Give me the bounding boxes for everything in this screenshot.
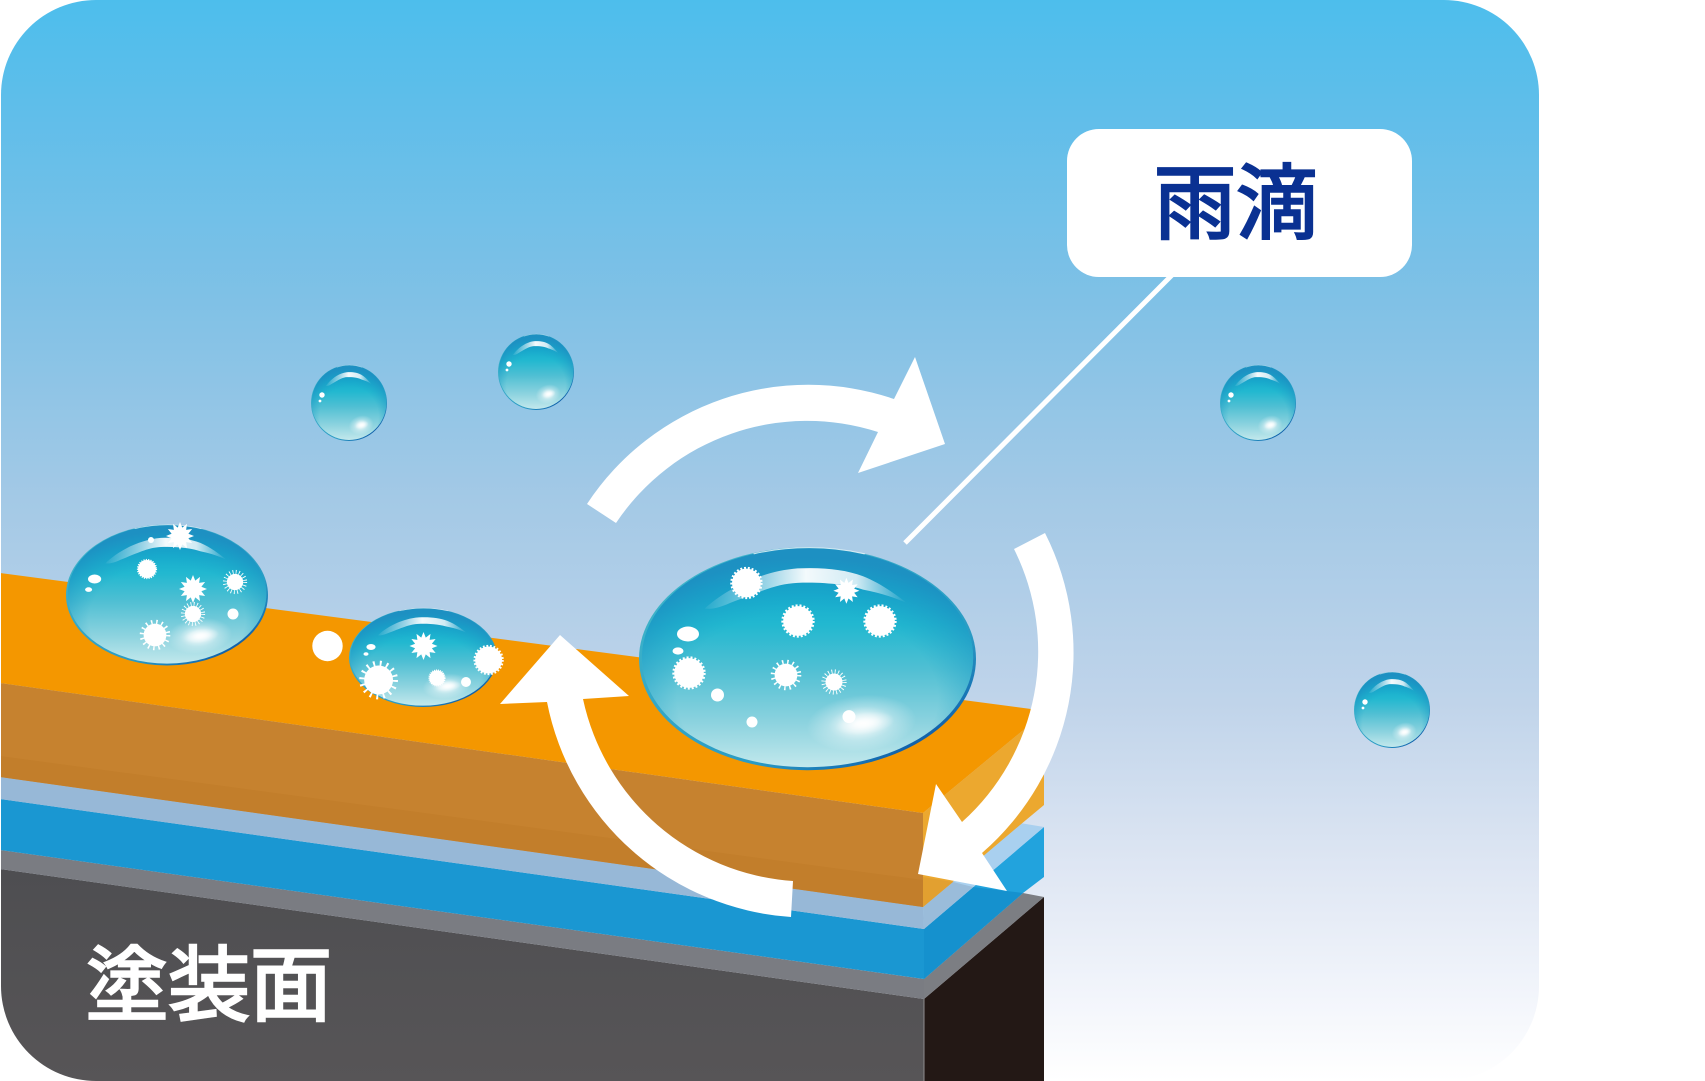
coating front face: [0, 683, 923, 907]
water drop: left on surface: [66, 522, 268, 666]
pale blue side shaded portion: [923, 882, 973, 929]
blue layer side: [924, 827, 1044, 979]
arrow: left circular arrow: [500, 635, 793, 917]
coating front lower shade: [1, 777, 923, 907]
water drop: airborne 2: [498, 334, 574, 410]
dark base side: [924, 897, 1044, 1081]
germs in left drop: [85, 522, 245, 648]
callout box: raindrop label: [1067, 129, 1412, 277]
water drop: airborne 3: [1220, 365, 1296, 441]
coating top surface: [0, 573, 1031, 813]
coating side shaded portion: [923, 877, 953, 907]
pale blue layer front: [0, 777, 924, 929]
grey layer side: [924, 893, 1044, 999]
callout leader line: [905, 275, 1172, 543]
water drop: small on surface: [349, 608, 503, 707]
blue layer front: [0, 799, 924, 979]
germs in large drop: [672, 568, 895, 728]
pale blue layer side: [923, 823, 1044, 929]
water drop: airborne 4: [1354, 672, 1430, 748]
callout text: 雨滴: [1154, 159, 1318, 250]
arrow: top circular arrow: [587, 357, 945, 523]
blue side shaded portion: [924, 887, 1023, 979]
water drop: airborne 1: [311, 365, 387, 441]
coating side face: [923, 727, 1044, 907]
corner highlight line: [924, 999, 925, 1081]
dark painted base front: [0, 869, 924, 1081]
germs in small drop: [362, 632, 503, 697]
arrow: right circular arrow: [918, 533, 1074, 891]
water drop: large on surface: [639, 547, 976, 770]
grey layer front: [0, 850, 924, 999]
label: painted surface: 塗装面: [86, 941, 332, 1032]
white particle between drops: [312, 631, 343, 661]
